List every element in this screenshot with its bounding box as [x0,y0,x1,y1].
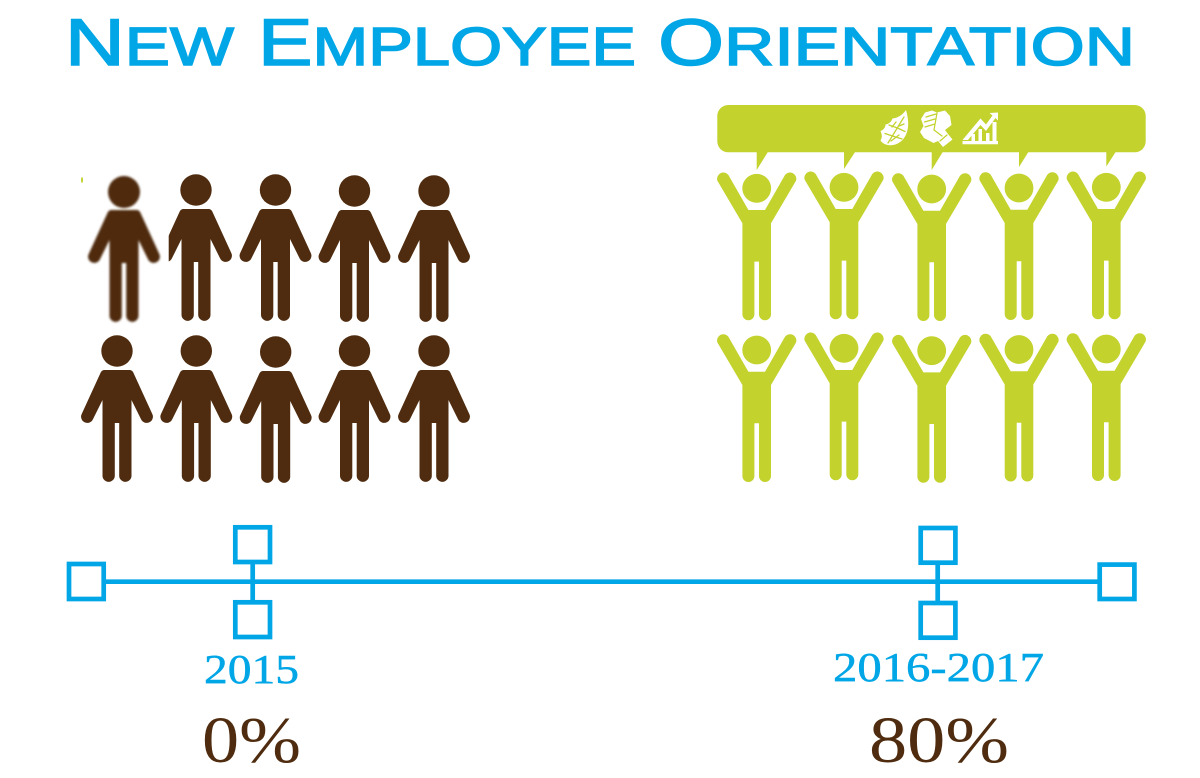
label: 2016-2017: 2016-2017 [833,644,1044,690]
label: 2015: 2015 [204,646,299,692]
figure: green person row 2 col 4 [979,334,1059,482]
figure: green person row 2 col 2 [804,332,884,480]
figure: brown person row 2 col 3 [240,336,312,483]
figure: green person row 1 col 2 [804,171,884,319]
figure: brown person row 2 col 2 [160,335,232,482]
title: O RIENTATION [658,5,1135,79]
title [65,5,1135,79]
figure: brown person row 1 col 2 [168,174,232,321]
figure: brown person row 1 col 3 [240,174,311,321]
icon: clasped hands [920,110,952,147]
2016-2017 lower marker [921,603,955,638]
icon: rising chart [962,112,998,144]
figure: green person row 2 col 5 [1067,333,1146,481]
icon: stray green speck [81,177,83,183]
figure: blurred brown person [88,176,160,322]
title: EMPLOYEE [258,5,636,79]
timeline [69,527,1134,638]
figure: green person row 2 col 3 [892,335,971,483]
figure: brown person row 1 col 5 [398,175,470,322]
figure: brown person row 2 col 1 [81,335,153,482]
figure: brown person row 2 col 5 [398,335,470,482]
timeline start marker [69,564,104,599]
timeline end marker [1100,565,1134,599]
figure: green person row 1 col 5 [1067,171,1146,319]
figure: green person row 1 col 3 [892,173,971,321]
stat: 80%: 80% [869,704,1009,777]
2015 upper marker [235,527,270,562]
figure: brown person row 2 col 4 [319,335,390,482]
group: brown figures 2015 [81,174,470,483]
group: green figures 2016-2017 [717,171,1146,483]
speech bubble [717,105,1146,170]
figure: brown person row 1 col 4 [319,175,390,322]
figure: green person row 2 col 1 [717,334,796,482]
2016-2017 upper marker [921,528,955,563]
title: NEW [65,5,234,79]
figure: green person row 1 col 4 [979,172,1059,320]
stat: 0%: 0% [202,704,301,777]
icon: leaf [880,110,908,145]
2015 lower marker [235,602,270,637]
figure: green person row 1 col 1 [717,172,796,320]
